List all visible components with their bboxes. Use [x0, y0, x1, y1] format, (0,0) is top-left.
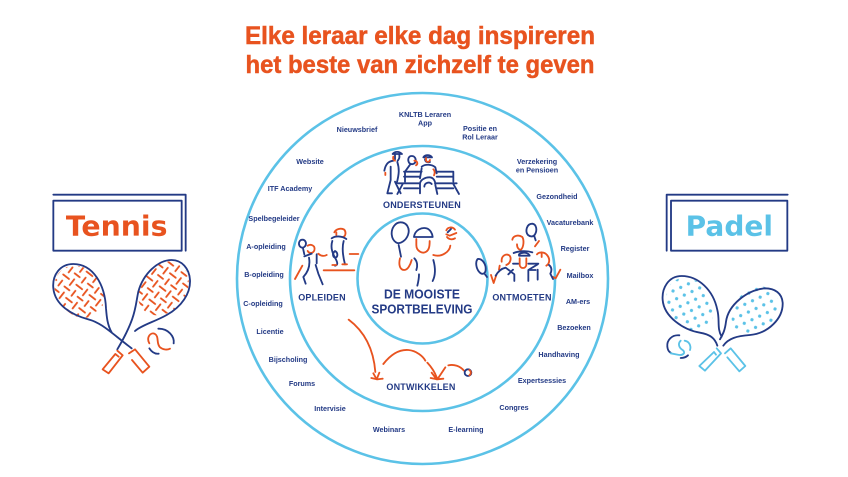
- outer ring labels: Rol Leraar: [462, 132, 498, 142]
- outer ring labels: Positie en: [463, 124, 497, 133]
- icon: bouncing ball trajectory: [349, 320, 471, 379]
- outer ring labels: AM-ers: [566, 297, 590, 306]
- outer ring labels: ITF Academy: [268, 184, 312, 193]
- outer ring labels: Website: [296, 157, 324, 166]
- outer ring labels: Licentie: [256, 327, 284, 336]
- outer ring labels: [243, 110, 593, 434]
- icon: two players opleiden: [295, 229, 358, 284]
- heading: de mooiste sportbeleving: DE MOOISTE: [384, 288, 460, 302]
- tennis handles: [103, 349, 149, 373]
- outer ring labels: B-opleiding: [244, 270, 284, 279]
- outer ring labels: Handhaving: [538, 350, 580, 359]
- tennis racket hatching: [54, 261, 189, 318]
- outer ring labels: Congres: [499, 403, 529, 412]
- outer ring labels: A-opleiding: [246, 242, 286, 251]
- outer ring labels: Webinars: [373, 425, 405, 434]
- outer ring labels: Register: [561, 244, 590, 253]
- outer ring labels: Bezoeken: [557, 323, 591, 332]
- outer ring labels: Vacaturebank: [547, 218, 593, 227]
- outer ring labels: Gezondheid: [536, 192, 578, 201]
- outer ring labels: Spelbegeleider: [248, 214, 300, 223]
- outer ring labels: Forums: [289, 379, 315, 388]
- outer ring labels: KNLTB Leraren: [399, 110, 451, 119]
- heading: de mooiste sportbeleving: SPORTBELEVING: [372, 302, 472, 316]
- padel ball: [667, 335, 690, 358]
- title: Elke leraar elke dag inspireren: [245, 22, 595, 50]
- outer ring labels: Bijscholing: [269, 355, 307, 364]
- heading: ontmoeten: ONTMOETEN: [492, 292, 552, 302]
- tennis ball: [148, 329, 174, 354]
- icon: group ontmoeten: [476, 224, 560, 283]
- outer ring labels: App: [418, 118, 433, 128]
- outer ring labels: en Pensioen: [516, 166, 558, 174]
- tennis rackets: [53, 260, 190, 349]
- heading: ontwikkelen: ONTWIKKELEN: [386, 382, 456, 392]
- icon: people on bench: [384, 152, 459, 194]
- icon: tennis player centre: [392, 222, 456, 286]
- outer ring labels: Nieuwsbrief: [337, 125, 378, 134]
- title: [245, 22, 595, 79]
- outer ring labels: Verzekering: [517, 157, 557, 166]
- padel label: Padel: [686, 209, 773, 242]
- panel: concentric circles: [237, 93, 608, 464]
- heading: ondersteunen: ONDERSTEUNEN: [383, 200, 461, 210]
- outer ring labels: Mailbox: [567, 271, 593, 280]
- outer ring labels: E-learning: [448, 425, 484, 434]
- tennis title box: [53, 195, 186, 251]
- padel title box: [667, 195, 788, 251]
- panel: padel: [663, 195, 788, 371]
- title: het beste van zichzelf te geven: [246, 51, 594, 79]
- padel handles: [699, 348, 745, 371]
- heading: de mooiste sportbeleving: [372, 288, 472, 316]
- tennis label: Tennis: [66, 209, 167, 242]
- outer ring labels: Intervisie: [314, 404, 346, 413]
- padel racket dots: [667, 278, 780, 333]
- heading: opleiden: OPLEIDEN: [298, 292, 346, 302]
- outer ring labels: Expertsessies: [518, 376, 566, 385]
- panel: tennis: [50, 195, 193, 373]
- padel rackets: [663, 276, 783, 346]
- outer ring labels: C-opleiding: [243, 299, 283, 308]
